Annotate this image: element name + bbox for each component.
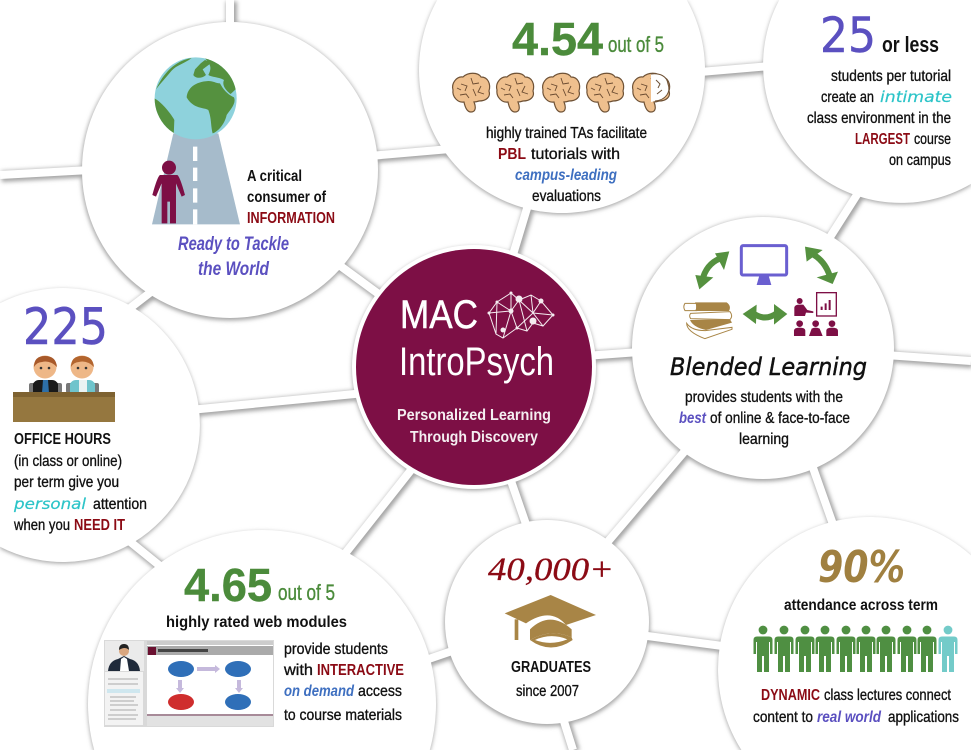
text: students per tutorial (807, 68, 952, 169)
text: provides students: provides students with the (685, 389, 843, 406)
stat: 4.65 out of 5 (184, 559, 335, 611)
text: dynamic class lectures: applications (888, 709, 959, 726)
icon: network brain (488, 292, 554, 338)
panel: TA evaluations (419, 0, 705, 213)
heading: highly rated web modules: highly rated web modules (166, 614, 347, 631)
panel: class size (763, 0, 971, 203)
text: office hours: personal (13, 495, 87, 513)
text: office hours: per term give you (14, 474, 119, 491)
text: provide students: access (358, 683, 402, 700)
text: attendance across term: attendance across term (784, 597, 938, 614)
text: a critical consumer of information: consumer of (247, 189, 327, 206)
text: office hours (13, 431, 147, 534)
text: highly trained TAs: tutorials with (531, 146, 620, 163)
heading: ready to tackle the world (178, 234, 289, 280)
stat: 25 or less: or less (882, 32, 939, 57)
logo: MAC IntroPsych: MAC (400, 293, 478, 337)
text: provide students: on demand (284, 683, 355, 700)
text: dynamic class lectures: real world (817, 709, 882, 726)
logo: MAC IntroPsych: IntroPsych (399, 340, 554, 384)
text: provide students: INTERACTIVE (317, 662, 404, 679)
text: a critical consumer of information: INFORMATION (247, 210, 335, 227)
tagline: Personalized Learning (397, 407, 551, 424)
text: students per tutorial: course (914, 131, 951, 148)
panel: central logo (352, 245, 596, 489)
panel: office hours (0, 288, 200, 562)
heading: ready to tackle the world: Ready to Tackle (178, 234, 289, 255)
stat: 4.65 out of 5: 4.65 (184, 559, 272, 611)
text: students per tutorial: on campus (889, 152, 951, 169)
text: highly trained TAs: evaluations (532, 188, 601, 205)
text: dynamic class lectures (753, 687, 959, 726)
stat: 40,000+: 40,000+ (488, 552, 614, 588)
icon: graduation cap (505, 595, 596, 647)
panel: ready to tackle the world (82, 22, 378, 318)
stat: 4.54 out of 5 (512, 13, 664, 65)
text: a critical consumer of information (247, 168, 335, 227)
text: highly trained TAs: PBL (498, 146, 526, 163)
panel: attendance (718, 517, 971, 750)
text: students per tutorial: create an (821, 89, 874, 106)
text: provides students: of online & face-to-face (710, 410, 850, 427)
text: graduates: since 2007 (516, 683, 579, 700)
tagline: Through Discovery (410, 429, 538, 446)
stat: 4.54 out of 5: out of 5 (608, 32, 664, 57)
text: provide students: provide students (284, 641, 388, 658)
icon: two people at desk (13, 356, 115, 422)
text: graduates (511, 659, 591, 700)
text: graduates: GRADUATES (511, 659, 591, 676)
text: highly trained TAs: campus-leading (515, 167, 617, 184)
text: a critical consumer of information: A critical (247, 168, 302, 185)
panel: blended learning (632, 217, 894, 479)
icon: blended learning cycle (684, 246, 838, 339)
stat: 90%: 90% (818, 542, 905, 593)
icon: road with globe and person (152, 57, 240, 224)
icon: ten people, nine filled (754, 626, 958, 672)
panel: graduates (445, 520, 649, 724)
text: provide students: to course materials (284, 707, 402, 724)
text: office hours: (in class or online) (14, 453, 122, 470)
icon: five brains rating (453, 73, 670, 112)
stat: 225: 225 (23, 298, 108, 356)
text: provides students (679, 389, 850, 448)
text: provides students: learning (739, 431, 789, 448)
text: office hours: NEED IT (74, 517, 125, 534)
text: office hours: OFFICE HOURS (14, 431, 111, 448)
stat: 4.54 out of 5: 4.54 (512, 13, 603, 65)
text: office hours: when you (13, 517, 70, 534)
text: highly trained TAs (486, 125, 647, 205)
text: students per tutorial: LARGEST (855, 131, 910, 148)
text: dynamic class lectures: DYNAMIC (761, 687, 820, 704)
text: students per tutorial: students per tutorial (831, 68, 951, 85)
text: dynamic class lectures: content to (753, 709, 813, 726)
stat: 25 or less: 25 (820, 8, 876, 64)
text: students per tutorial: intimate (880, 88, 952, 106)
stat: 25 or less (820, 8, 939, 64)
screenshot: web module (104, 640, 274, 727)
logo: MAC IntroPsych (399, 293, 554, 384)
text: highly trained TAs: highly trained TAs facilitate (486, 125, 647, 142)
tagline (397, 407, 551, 446)
text: provide students: with (283, 662, 313, 679)
heading: ready to tackle the world: the World (198, 259, 269, 280)
panel: web modules (88, 530, 436, 750)
heading: blended learning: Blended Learning (670, 353, 867, 381)
stat: 4.65 out of 5: out of 5 (278, 580, 335, 605)
text: office hours: attention (93, 496, 147, 513)
text: provide students (283, 641, 404, 724)
text: provides students: best (679, 410, 707, 427)
